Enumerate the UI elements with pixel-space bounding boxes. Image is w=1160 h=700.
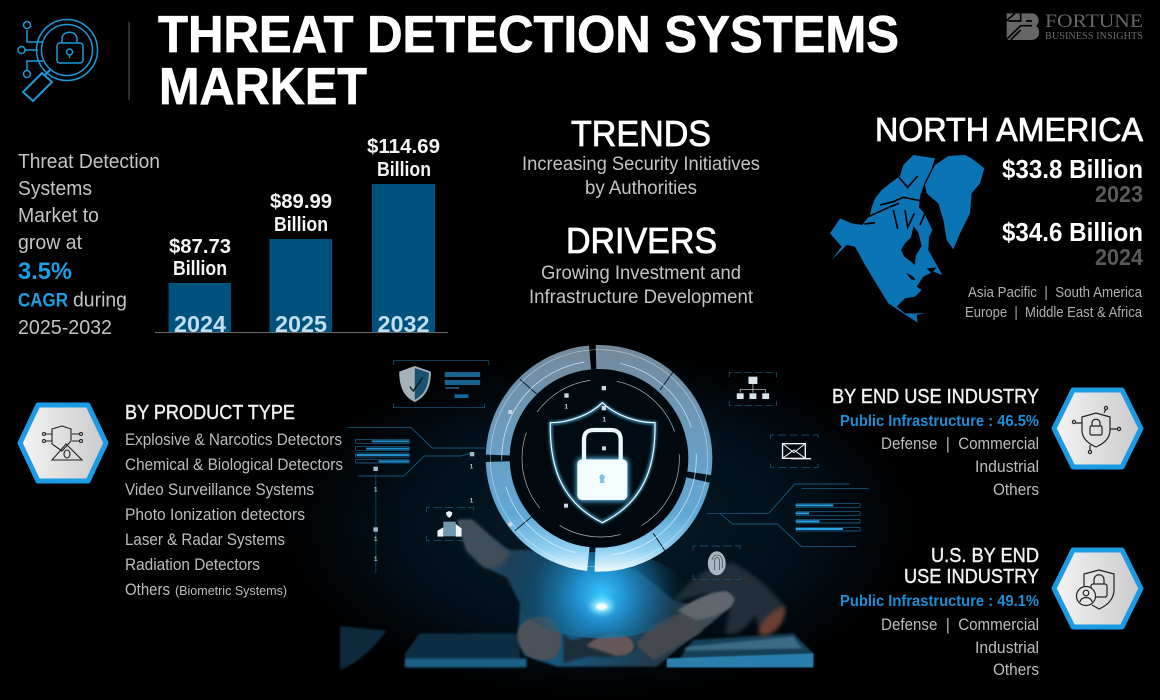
ring digits and nodes: 1 [564,403,568,410]
bar 2025: $89.99 [270,190,332,213]
trends block [522,113,760,199]
ring digits and nodes [508,386,606,526]
CAGR statement: 2025-2032 [18,316,112,339]
trends block: by Authorities [585,177,697,199]
background glow [280,350,920,700]
by end use industry text: Industrial [975,457,1039,476]
by end use industry text: Others [993,480,1039,499]
by product type list: Photo Ionization detectors [125,505,305,524]
bar 2024: $87.73 [169,235,231,258]
CAGR statement: Threat Detection [18,150,160,173]
fingerprint icon card [693,546,740,579]
hexagon icon: end use industry [1054,390,1141,467]
CAGR statement: grow at [18,231,82,254]
North America stats: 2023 [1095,181,1143,207]
US by end use industry text: Public Infrastructure : 49.1% [840,593,1039,610]
by product type list: Chemical & Biological Detectors [125,455,343,474]
Greenland [925,155,984,249]
binary digits: 1 [374,487,378,494]
CAGR statement: 3.5% [18,258,72,285]
CAGR statement: Systems [18,177,92,200]
hand and keyboard [405,520,813,667]
US by end use industry text: Defense | Commercial [881,615,1039,634]
drivers block: Growing Investment and [541,262,741,284]
header divider [128,22,130,100]
side interface cards [348,361,869,579]
bar 2032: 2032 [378,311,430,337]
US by end use industry text [840,545,1039,679]
left circuit data bars [348,427,485,573]
trends block: Increasing Security Initiatives [522,153,760,175]
login card [393,361,489,408]
binary digits: 1 [469,497,474,504]
by end use industry text: Defense | Commercial [881,434,1039,453]
brand logo: BUSINESS INSIGHTS [1045,31,1143,42]
by product type list: Laser & Radar Systems [125,530,285,549]
background hand [673,563,785,636]
palm light point [590,598,613,614]
palm glow [515,552,688,638]
by product type list: Radiation Detectors [125,555,260,574]
Arctic channels [864,176,925,229]
by end use industry text: BY END USE INDUSTRY [832,386,1039,408]
North America stats: Europe | Middle East & Africa [965,305,1143,321]
padlock [577,430,628,501]
envelope icon card [770,435,818,467]
US by end use industry text: Others [993,660,1039,679]
CAGR statement: Market to [18,204,99,227]
title [158,6,899,116]
hexagon icon: US end use industry [1054,550,1141,627]
brand logo: FORTUNE [1045,11,1143,32]
by end use industry text: Public Infrastructure : 46.5% [840,413,1039,430]
binary digits: 1 [374,556,378,563]
bar 2032 [367,135,440,337]
drivers block: Infrastructure Development [529,286,754,308]
North America stats: $34.6 Billion [1002,217,1143,247]
shield line [550,403,655,523]
sleeve at left [340,626,386,670]
by product type list [125,402,343,599]
brand logo [1006,11,1143,42]
by product type list: (Biometric Systems) [175,583,287,598]
drivers block [529,220,754,308]
North America stats: $33.8 Billion [1002,154,1143,184]
by product type list: Video Surveillance Systems [125,480,314,499]
by product type list: Others [125,580,170,599]
bar 2024: 2024 [174,311,226,337]
CAGR statement: CAGR [18,290,68,312]
CAGR statement [18,150,160,339]
Canada, Arctic islands and mainland [830,155,942,323]
US by end use industry text: U.S. BY END [931,545,1039,567]
North America stats [875,111,1143,321]
shield glow [550,403,655,523]
bar chart: market size [155,135,448,337]
central hero illustration: hand holding shield and lock [340,350,869,670]
ring [490,350,708,567]
ring digits and nodes: 1 [602,417,606,424]
keyboard [405,633,813,667]
bar 2025: 2025 [275,311,327,337]
binary digits: 1 [469,463,474,470]
North America map [830,155,984,323]
by product type list: Explosive & Narcotics Detectors [125,430,342,449]
Hudson Bay [901,226,922,265]
North America stats: 2024 [1095,244,1143,270]
binary digits [373,452,474,563]
by product type list: BY PRODUCT TYPE [125,402,295,424]
US by end use industry text: Industrial [975,638,1039,657]
bar 2025 [270,190,332,337]
North America stats: NORTH AMERICA [875,111,1143,148]
bar 2032: $114.69 [367,135,440,158]
binary digits: 1 [374,536,378,543]
US by end use industry text: USE INDUSTRY [904,566,1039,588]
network icon card [729,372,776,406]
CAGR statement: during [73,288,127,312]
drivers block: DRIVERS [566,220,717,261]
logo icon: magnifier with padlock [18,20,98,101]
bar 2024: Billion [173,257,227,280]
by end use industry text [832,386,1039,499]
right circuit data bars [707,484,869,547]
trends block: TRENDS [571,113,711,154]
bar 2032: Billion [377,158,431,181]
Great Lakes [906,267,937,280]
security ring, shield and padlock [490,350,708,567]
North America stats: Asia Pacific | South America [968,285,1143,301]
bar 2024 [168,235,231,337]
title: MARKET [159,58,367,116]
building icon card [426,508,474,541]
open hand [457,520,735,667]
bar 2025: Billion [274,213,328,236]
title: THREAT DETECTION SYSTEMS [158,6,899,64]
hexagon icon: product type [20,405,106,481]
